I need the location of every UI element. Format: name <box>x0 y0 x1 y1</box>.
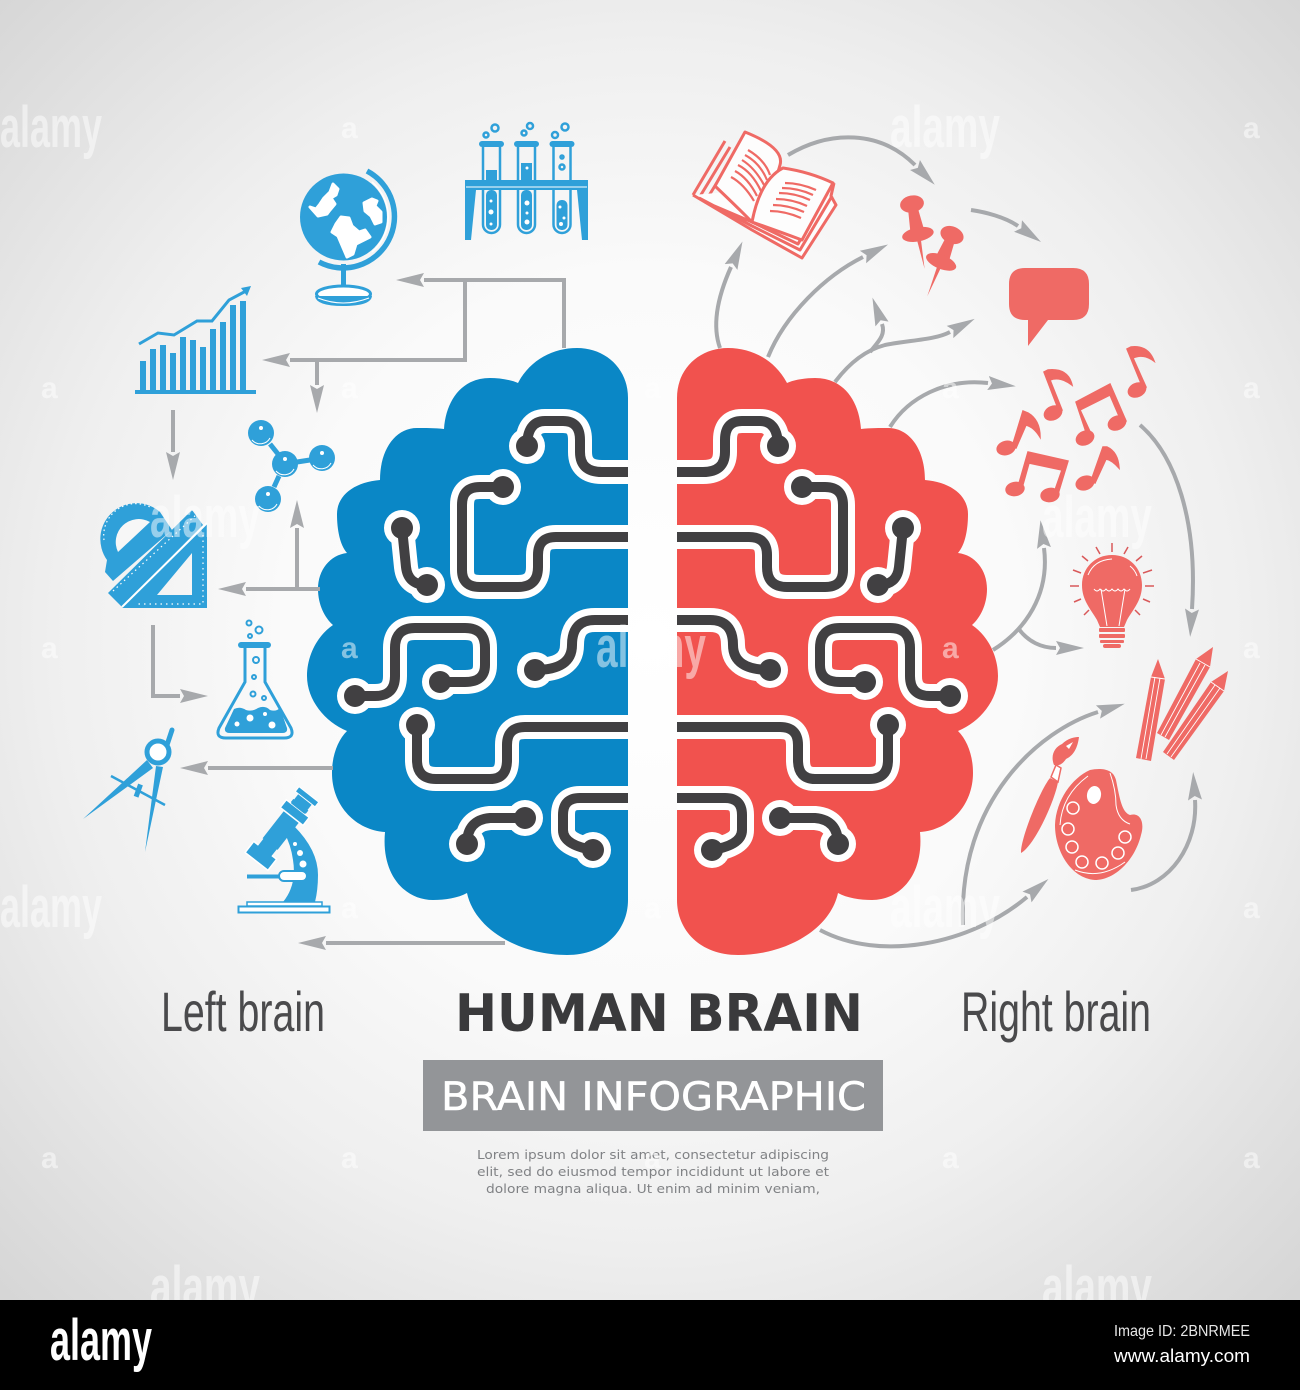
watermarks: a <box>341 372 358 405</box>
watermarks: a <box>942 372 959 405</box>
watermarks: a <box>1243 372 1260 405</box>
footer band: alamy <box>50 1308 152 1373</box>
watermarks: a <box>942 632 959 665</box>
watermarks: a <box>644 892 661 925</box>
footer band: www.alamy.com <box>1113 1346 1250 1366</box>
title: HUMAN BRAIN <box>455 984 863 1044</box>
lorem ipsum text block: dolore magna aliqua. Ut enim ad minim veniam, <box>486 1182 820 1196</box>
subtitle banner: BRAIN INFOGRAPHIC <box>441 1075 866 1120</box>
watermarks: a <box>1243 1142 1260 1175</box>
watermarks: a <box>1243 632 1260 665</box>
icon: music notes <box>996 347 1154 503</box>
icon: flask <box>218 620 292 738</box>
right brain circuit traces <box>677 421 950 850</box>
watermarks: a <box>41 372 58 405</box>
icon: molecule <box>248 420 335 512</box>
left brain circuit nodes <box>344 435 604 861</box>
watermarks: alamy <box>1042 485 1152 550</box>
beamed notes lower <box>1005 452 1068 503</box>
watermarks: a <box>341 632 358 665</box>
icon: globe <box>300 171 394 306</box>
watermarks: a <box>644 1142 661 1175</box>
lorem ipsum text block <box>477 1148 829 1196</box>
note <box>1042 370 1072 423</box>
watermarks: alamy <box>150 1255 260 1320</box>
icon: bar chart <box>135 286 256 394</box>
icon: paint palette <box>1055 769 1142 880</box>
watermarks: alamy <box>0 875 102 940</box>
icon: speech bubble <box>1009 268 1089 346</box>
watermarks: a <box>341 892 358 925</box>
watermarks: a <box>41 632 58 665</box>
watermarks: a <box>341 1142 358 1175</box>
right side curved arrows <box>716 137 1195 946</box>
icon: test tubes <box>465 123 588 240</box>
label: left brain: Left brain <box>161 980 325 1043</box>
left brain hemisphere <box>307 348 628 955</box>
icon: push pins <box>895 193 970 302</box>
left side straight arrows <box>153 280 564 943</box>
watermarks: alamy <box>0 95 102 160</box>
icon: light bulb <box>1070 543 1154 648</box>
icon: drawing compass <box>83 730 172 852</box>
right brain circuit node halos <box>694 428 968 868</box>
watermarks: alamy <box>1042 1255 1152 1320</box>
subtitle banner <box>423 1060 883 1131</box>
icon: pencils <box>1136 647 1228 761</box>
watermarks: alamy <box>890 875 1000 940</box>
footer band: Image ID: 2BNRMEE <box>1114 1323 1250 1340</box>
note <box>1126 347 1154 400</box>
right brain hemisphere <box>677 348 998 955</box>
watermarks: alamy <box>596 615 706 680</box>
footer band <box>0 1300 1300 1390</box>
watermarks: a <box>942 1142 959 1175</box>
note <box>996 411 1040 457</box>
watermarks: a <box>1243 112 1260 145</box>
left brain circuit traces <box>355 421 628 850</box>
icon: open book <box>693 132 836 258</box>
watermarks: a <box>1243 892 1260 925</box>
watermarks: alamy <box>150 485 260 550</box>
lorem ipsum text block: elit, sed do eiusmod tempor incididunt ut labore et <box>477 1165 829 1179</box>
icon: paint brush <box>1021 737 1079 853</box>
watermarks: a <box>41 1142 58 1175</box>
icon: microscope <box>238 785 330 912</box>
icon: protractor and set square <box>100 503 207 608</box>
left brain circuit outlines <box>355 421 628 850</box>
watermarks: a <box>644 372 661 405</box>
beamed notes upper <box>1074 384 1128 448</box>
right brain circuit nodes <box>701 435 961 861</box>
label: right brain: Right brain <box>961 980 1151 1043</box>
note <box>1074 447 1119 492</box>
left brain circuit node halos <box>337 428 611 868</box>
watermarks: alamy <box>890 95 1000 160</box>
watermarks: a <box>341 112 358 145</box>
right brain circuit outlines <box>677 421 950 850</box>
lorem ipsum text block: Lorem ipsum dolor sit amet, consectetur adipiscing <box>477 1148 829 1162</box>
